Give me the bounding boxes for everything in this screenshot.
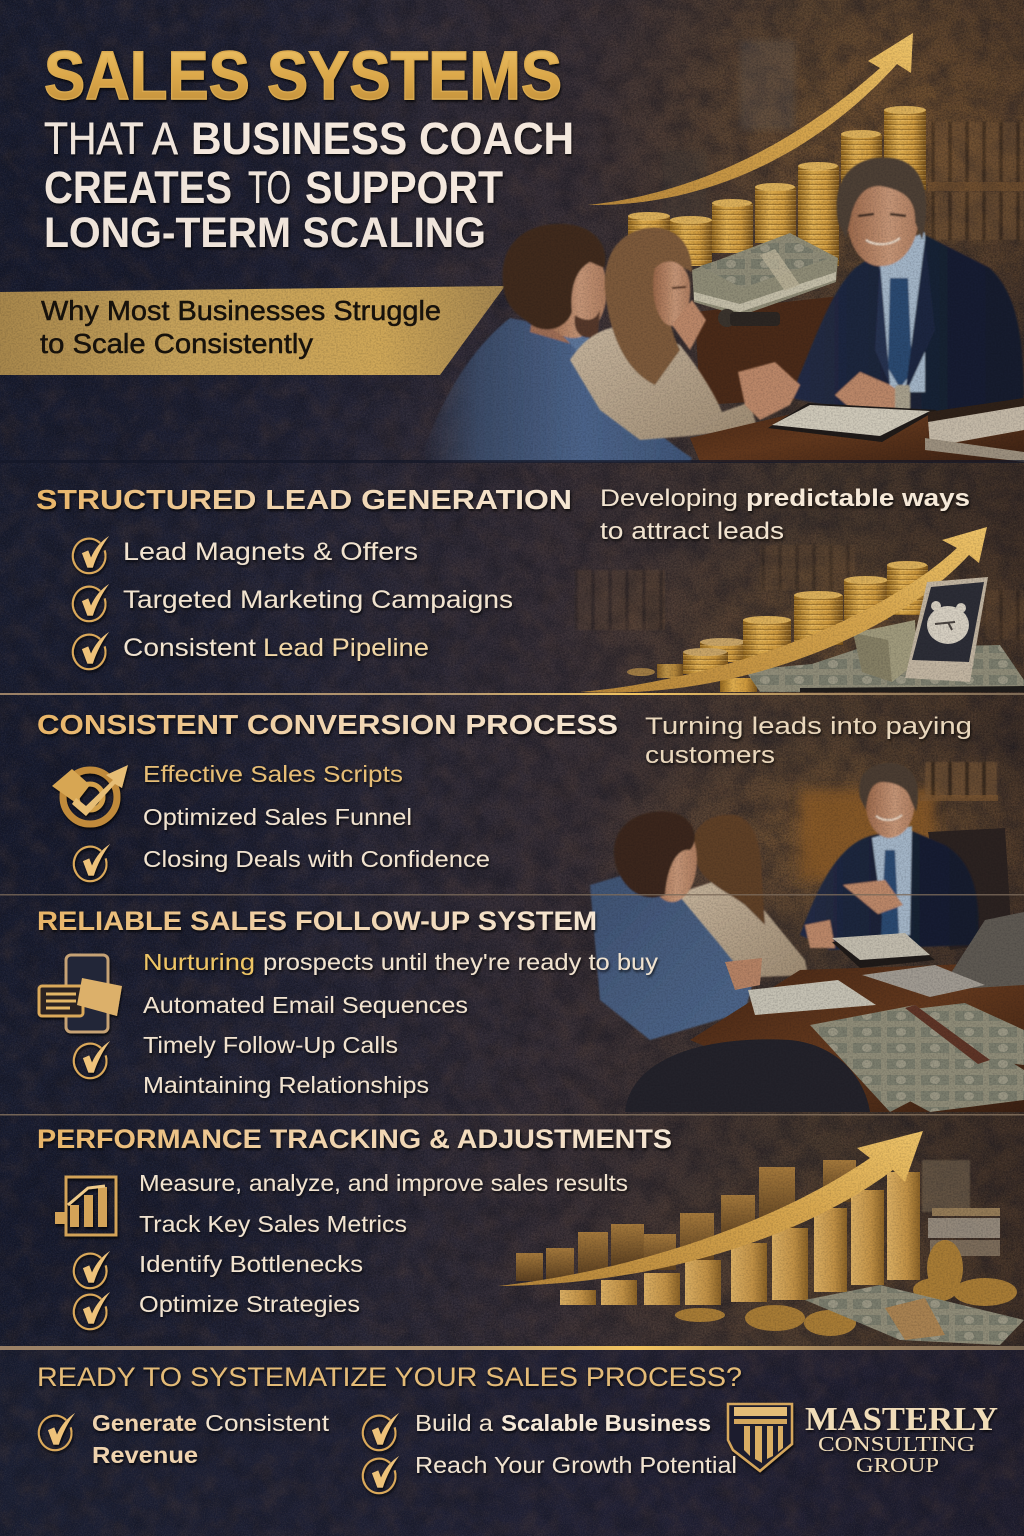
leather chair (625, 1039, 870, 1112)
money pile (745, 620, 1024, 692)
benefit: consistent revenue: Revenue (92, 1442, 198, 1468)
panel: consistent conversion process (37, 709, 972, 881)
checklist: Measure, analyze, and improve sales results (139, 1170, 628, 1196)
checklist: Track Key Sales Metrics (139, 1211, 407, 1237)
checklist: Maintaining Relationships (143, 1072, 429, 1098)
client woman (672, 815, 808, 978)
banner (0, 286, 505, 375)
checklist (74, 1170, 628, 1329)
notebook (768, 403, 937, 442)
icon: chart on tablet (55, 1177, 116, 1235)
title: BUSINESS COACH (191, 113, 574, 164)
title: CREATES (44, 162, 232, 213)
heading: READY TO SYSTEMATIZE YOUR SALES PROCESS? (37, 1362, 742, 1392)
heading: STRUCTURED LEAD GENERATION (36, 484, 572, 515)
logo: masterly consulting group: CONSULTING (818, 1432, 975, 1456)
logo: masterly consulting group: MASTERLY (805, 1401, 998, 1438)
checklist (74, 761, 490, 881)
growth arrow (498, 1131, 923, 1286)
coach (800, 763, 979, 950)
section dividers (0, 693, 1024, 1350)
title (44, 37, 574, 257)
heading: PERFORMANCE TRACKING & ADJUSTMENTS (37, 1124, 672, 1154)
checklist: Consistent (123, 634, 256, 662)
warm bookshelves (800, 762, 998, 880)
section 1 illustration (575, 527, 1024, 693)
books (925, 398, 1024, 462)
description: Turning leads into paying (645, 713, 972, 740)
benefit: consistent revenue (39, 1410, 330, 1468)
desk (690, 962, 1024, 1112)
hero illustration (0, 33, 1024, 463)
panel: reliable sales follow-up system (37, 906, 659, 1098)
laptop (862, 912, 1024, 997)
benefit: consistent revenue: Generate (92, 1410, 197, 1436)
checklist (74, 949, 659, 1098)
heading: RELIABLE SALES FOLLOW-UP SYSTEM (37, 906, 597, 936)
checklist: Effective Sales Scripts (143, 761, 403, 787)
client man (590, 811, 752, 1040)
description (600, 485, 970, 545)
checklist: Nurturing (143, 949, 255, 975)
banner text: Why Most Businesses Struggle (41, 295, 441, 326)
benefit: consistent revenue: Consistent (205, 1410, 330, 1436)
benefit: scalable business (363, 1410, 711, 1450)
description (645, 713, 972, 769)
money stack (692, 233, 838, 316)
back bars (516, 1160, 856, 1281)
icon: pillar shield (728, 1404, 792, 1471)
checklist (73, 536, 513, 669)
document (748, 980, 876, 1015)
checklist: prospects until they're ready to buy (263, 949, 659, 975)
panel: structured lead generation (36, 484, 970, 669)
hero desk (690, 395, 1024, 462)
hands on desk (725, 958, 762, 990)
description: Developing (600, 485, 738, 512)
phone with clock icon (905, 577, 988, 682)
logo: masterly consulting group: GROUP (856, 1453, 939, 1477)
banner text (40, 295, 441, 359)
benefit: scalable business: Build a (415, 1410, 493, 1436)
books (922, 1160, 1000, 1256)
description: customers (645, 742, 775, 769)
section 4 illustration (498, 1131, 1024, 1345)
checklist: Lead Pipeline (263, 634, 429, 662)
front bars (560, 1172, 920, 1305)
title: TO (248, 162, 291, 213)
benefit: growth potential (363, 1452, 737, 1493)
growth arrow (580, 527, 987, 693)
panel: performance tracking and adjustments (37, 1124, 672, 1329)
client man (420, 224, 692, 462)
benefit: growth potential: Reach Your Growth Potential (415, 1452, 737, 1478)
title: SUPPORT (305, 162, 503, 213)
checklist: Closing Deals with Confidence (143, 846, 490, 872)
sections 2 and 3 illustration (590, 762, 1024, 1112)
coin stacks (627, 561, 928, 692)
coin stacks (628, 106, 926, 266)
coach chair (928, 828, 1012, 950)
description: predictable ways (746, 485, 970, 512)
checklist: Identify Bottlenecks (139, 1251, 363, 1277)
coach (738, 158, 1024, 420)
logo: masterly consulting group (728, 1401, 998, 1477)
back desk (695, 296, 852, 405)
icon: phone and envelope (39, 955, 122, 1032)
checklist: Lead Magnets & Offers (123, 538, 418, 566)
pen holder (718, 309, 780, 327)
growth arrow (588, 33, 913, 205)
checklist: Timely Follow-Up Calls (143, 1032, 398, 1058)
title: LONG-TERM SCALING (44, 209, 486, 257)
notebook (832, 933, 935, 968)
description: to attract leads (600, 518, 784, 545)
benefit: scalable business: Scalable Business (501, 1410, 711, 1436)
icon: target with arrow (52, 765, 128, 824)
checklist: Targeted Marketing Campaigns (123, 586, 513, 614)
bookshelf backdrop (662, 40, 1024, 265)
heading: CONSISTENT CONVERSION PROCESS (37, 709, 618, 740)
client woman (570, 228, 757, 440)
checklist: Optimized Sales Funnel (143, 804, 412, 830)
checklist: Automated Email Sequences (143, 992, 468, 1018)
bookshelves (575, 545, 1024, 640)
money bundle (805, 1285, 1024, 1345)
title: THAT A (44, 113, 178, 164)
banner text: to Scale Consistently (40, 328, 313, 359)
panel: call to action (37, 1362, 998, 1493)
title: SALES SYSTEMS (44, 37, 562, 114)
money stacks (810, 1003, 1024, 1112)
coins pile (675, 1240, 1017, 1336)
checklist: Optimize Strategies (139, 1291, 360, 1317)
